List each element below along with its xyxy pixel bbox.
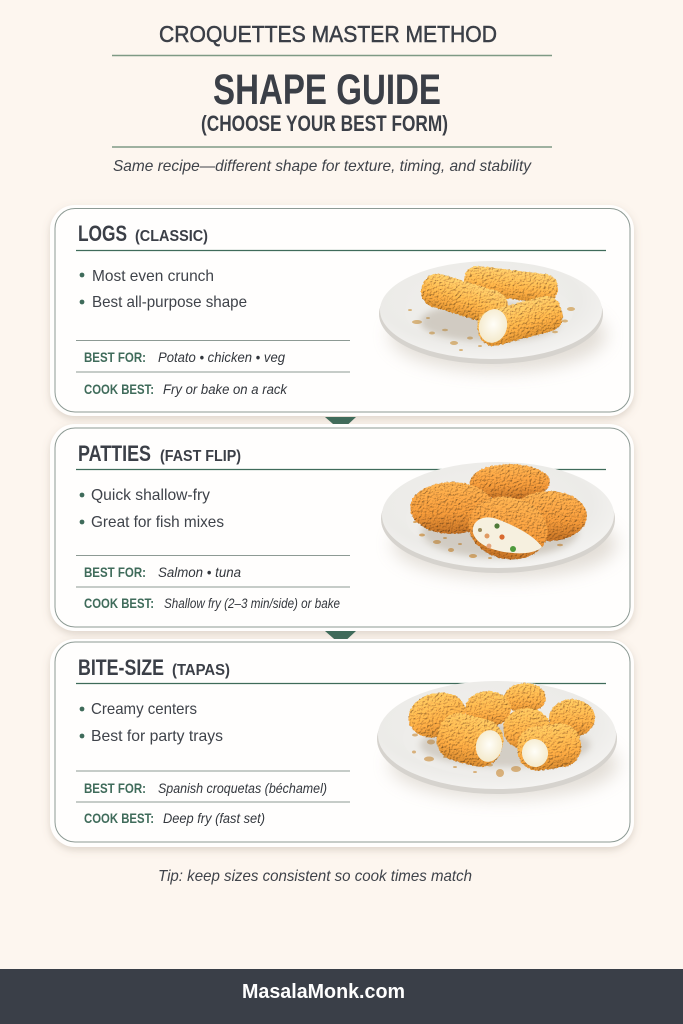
logs cook best: COOK BEST: xyxy=(84,381,154,397)
main title: SHAPE GUIDE xyxy=(213,66,441,114)
logs best for: BEST FOR: xyxy=(84,349,146,365)
logs bullets: Most even crunch xyxy=(92,268,214,285)
footer band xyxy=(0,969,683,1024)
image: plate of patties xyxy=(381,462,617,578)
arrow: logs to patties xyxy=(325,417,356,431)
bite-size cook best: COOK BEST: xyxy=(84,810,154,826)
bite-size heading: (TAPAS) xyxy=(172,662,230,679)
bite-size cook best: Deep fry (fast set) xyxy=(163,811,265,826)
image: plate of logs xyxy=(379,261,606,371)
patties bullets: Quick shallow-fry xyxy=(91,487,210,504)
patties heading xyxy=(78,441,241,466)
bite-size bullets: Best for party trays xyxy=(91,728,223,745)
logs cook best xyxy=(84,381,288,397)
logs cook best: Fry or bake on a rack xyxy=(163,382,288,397)
patties best for: BEST FOR: xyxy=(84,564,146,580)
panel: patties xyxy=(50,424,634,631)
logs best for: Potato • chicken • veg xyxy=(158,350,285,365)
bite-size best for: Spanish croquetas (béchamel) xyxy=(158,781,327,796)
bite-size heading xyxy=(78,655,230,680)
logs heading xyxy=(78,221,208,246)
patties heading: (FAST FLIP) xyxy=(160,448,241,465)
image: plate of bite-size croquettes xyxy=(377,681,618,798)
bite-size heading: BITE-SIZE xyxy=(78,655,164,680)
patties best for xyxy=(84,564,241,580)
tip text: Tip: keep sizes consistent so cook times match xyxy=(158,868,472,885)
bite-size bullets xyxy=(80,701,223,745)
logs bullets xyxy=(80,268,247,311)
header block xyxy=(112,21,552,175)
bite-size best for xyxy=(84,780,327,796)
logs best for xyxy=(84,349,285,365)
patties cook best: COOK BEST: xyxy=(84,595,154,611)
arrow: patties to bite-size xyxy=(325,631,356,645)
patties bullets xyxy=(80,487,224,531)
panel: logs xyxy=(50,205,634,416)
patties cook best xyxy=(84,595,340,611)
patties bullets: Great for fish mixes xyxy=(91,514,224,531)
patties cook best: Shallow fry (2–3 min/side) or bake xyxy=(164,596,340,611)
bite-size bullets: Creamy centers xyxy=(91,701,197,718)
logs bullets: Best all-purpose shape xyxy=(92,294,247,311)
panel: bite-size xyxy=(50,639,634,847)
logs heading: LOGS xyxy=(78,221,127,246)
patties heading: PATTIES xyxy=(78,441,151,466)
footer url: MasalaMonk.com xyxy=(242,981,405,1003)
bite-size best for: BEST FOR: xyxy=(84,780,146,796)
eyebrow title: CROQUETTES MASTER METHOD xyxy=(159,21,497,47)
bite-size cook best xyxy=(84,810,265,826)
patties best for: Salmon • tuna xyxy=(158,565,241,580)
tagline: Same recipe—different shape for texture, timing, and stability xyxy=(113,158,532,175)
logs heading: (CLASSIC) xyxy=(135,228,208,245)
title subheading: (CHOOSE YOUR BEST FORM) xyxy=(201,111,448,136)
